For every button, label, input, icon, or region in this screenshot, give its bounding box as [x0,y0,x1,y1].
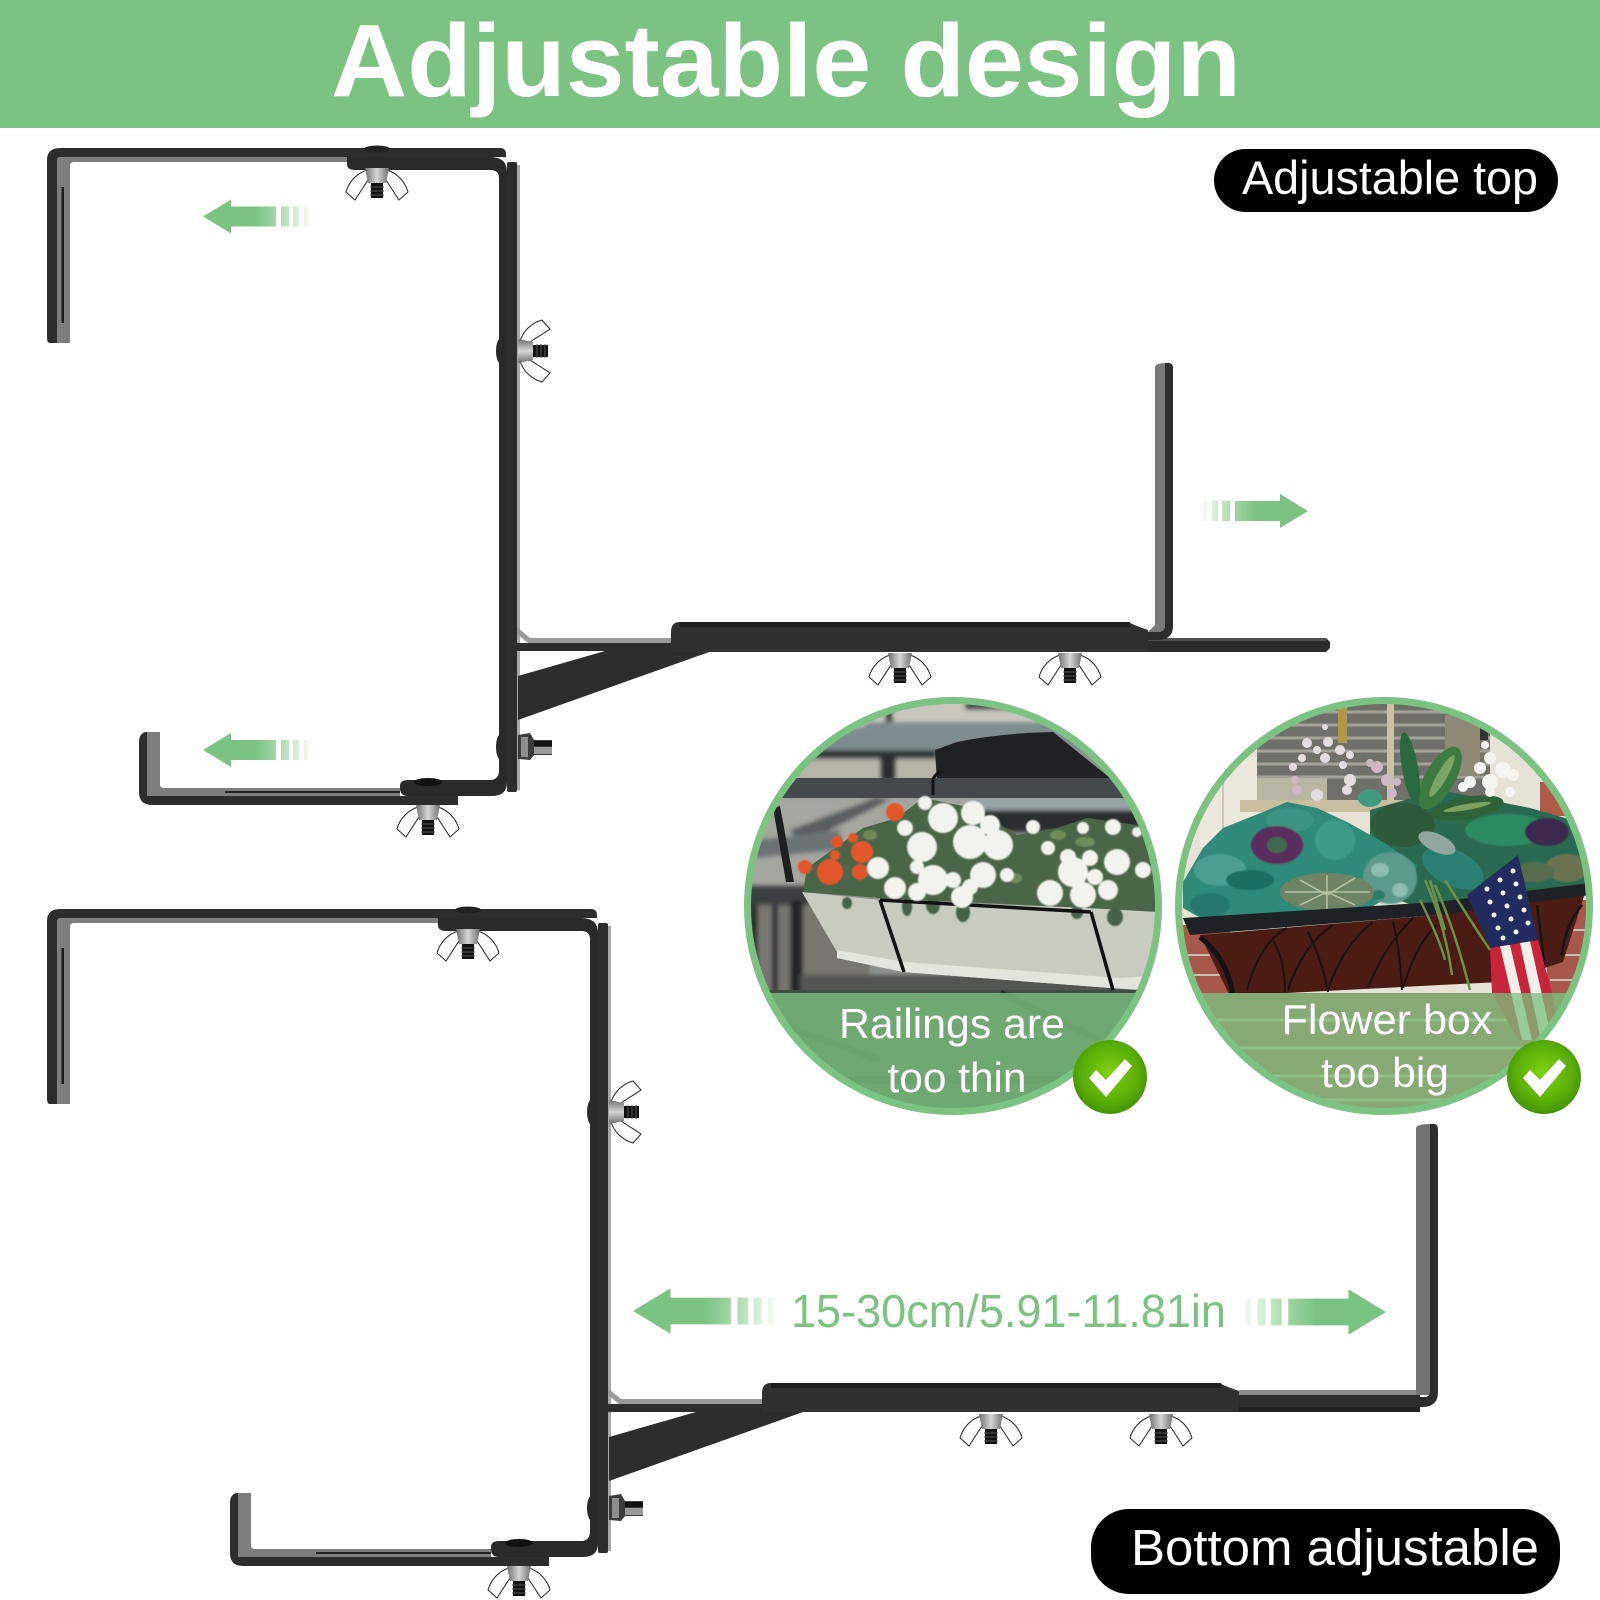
wing nuts [346,168,1101,837]
right upright and rail [1239,1124,1438,1412]
ring [1178,700,1590,1112]
shifted frame [230,918,1239,1598]
text band [770,993,1136,1108]
bracket assembly: top [47,146,1330,837]
caption: Railings are [839,1000,1065,1047]
icon: check badge left [1073,1040,1147,1114]
shelf rail and brace [517,622,1330,720]
header banner [0,0,1600,128]
green foliage [803,798,1160,912]
arrow: shelf right [1203,494,1308,528]
flag [1467,855,1560,1040]
photo: kale flower box with flag [1182,704,1586,1108]
caption [1282,996,1492,1096]
inner frame [347,157,507,796]
arrow: lower arm left [203,733,308,767]
ring [748,700,1158,1112]
outer post [587,923,611,1553]
trailing grass [1420,880,1490,990]
arrow: right [1245,1289,1386,1335]
label: adjustable top: Adjustable top [1242,151,1538,204]
caption: too big [1321,1049,1449,1096]
photo: flower box on railing [751,704,1155,1108]
caption [839,1000,1065,1101]
label: bottom adjustable: Bottom adjustable [1131,1519,1539,1576]
upper arm [47,146,506,343]
measurement: adjustable range [633,1285,1386,1337]
caption: too thin [888,1054,1026,1101]
orange flowers [798,803,904,885]
wire hanger [880,900,1113,990]
white flowers [867,796,1151,908]
box [1183,883,1590,996]
inner frame [438,918,598,1557]
arrow: left [633,1288,774,1334]
brick wall below band [1205,993,1563,1108]
leaves [1358,731,1505,898]
underlay below band [769,990,1136,1108]
blurred patio background [751,704,1139,990]
title: Adjustable design [331,3,1241,118]
lower arm [139,732,458,805]
label: bottom adjustable [1091,1509,1560,1594]
outer post [496,162,520,792]
lower arm [230,1493,549,1566]
text band [1202,993,1566,1108]
right upright [1148,363,1173,640]
upper arm [47,906,597,1104]
wing nuts [437,929,1192,1598]
kale [1183,802,1589,925]
shelf rail and brace [608,1383,1239,1481]
bracket assembly: bottom [47,906,1438,1598]
window [1222,704,1565,829]
planter [802,892,1160,990]
wall bricks [1182,900,1586,993]
small flowers [1289,724,1519,801]
arrow: upper arm left [203,200,308,234]
range text: 15-30cm/5.91-11.81in [791,1285,1226,1337]
foliage backing [1370,790,1590,915]
icon: check badge right [1507,1040,1581,1114]
photo circle: flower box too big [1170,695,1600,1125]
caption: Flower box [1282,996,1492,1043]
photo circle: railings are too thin [740,695,1170,1125]
